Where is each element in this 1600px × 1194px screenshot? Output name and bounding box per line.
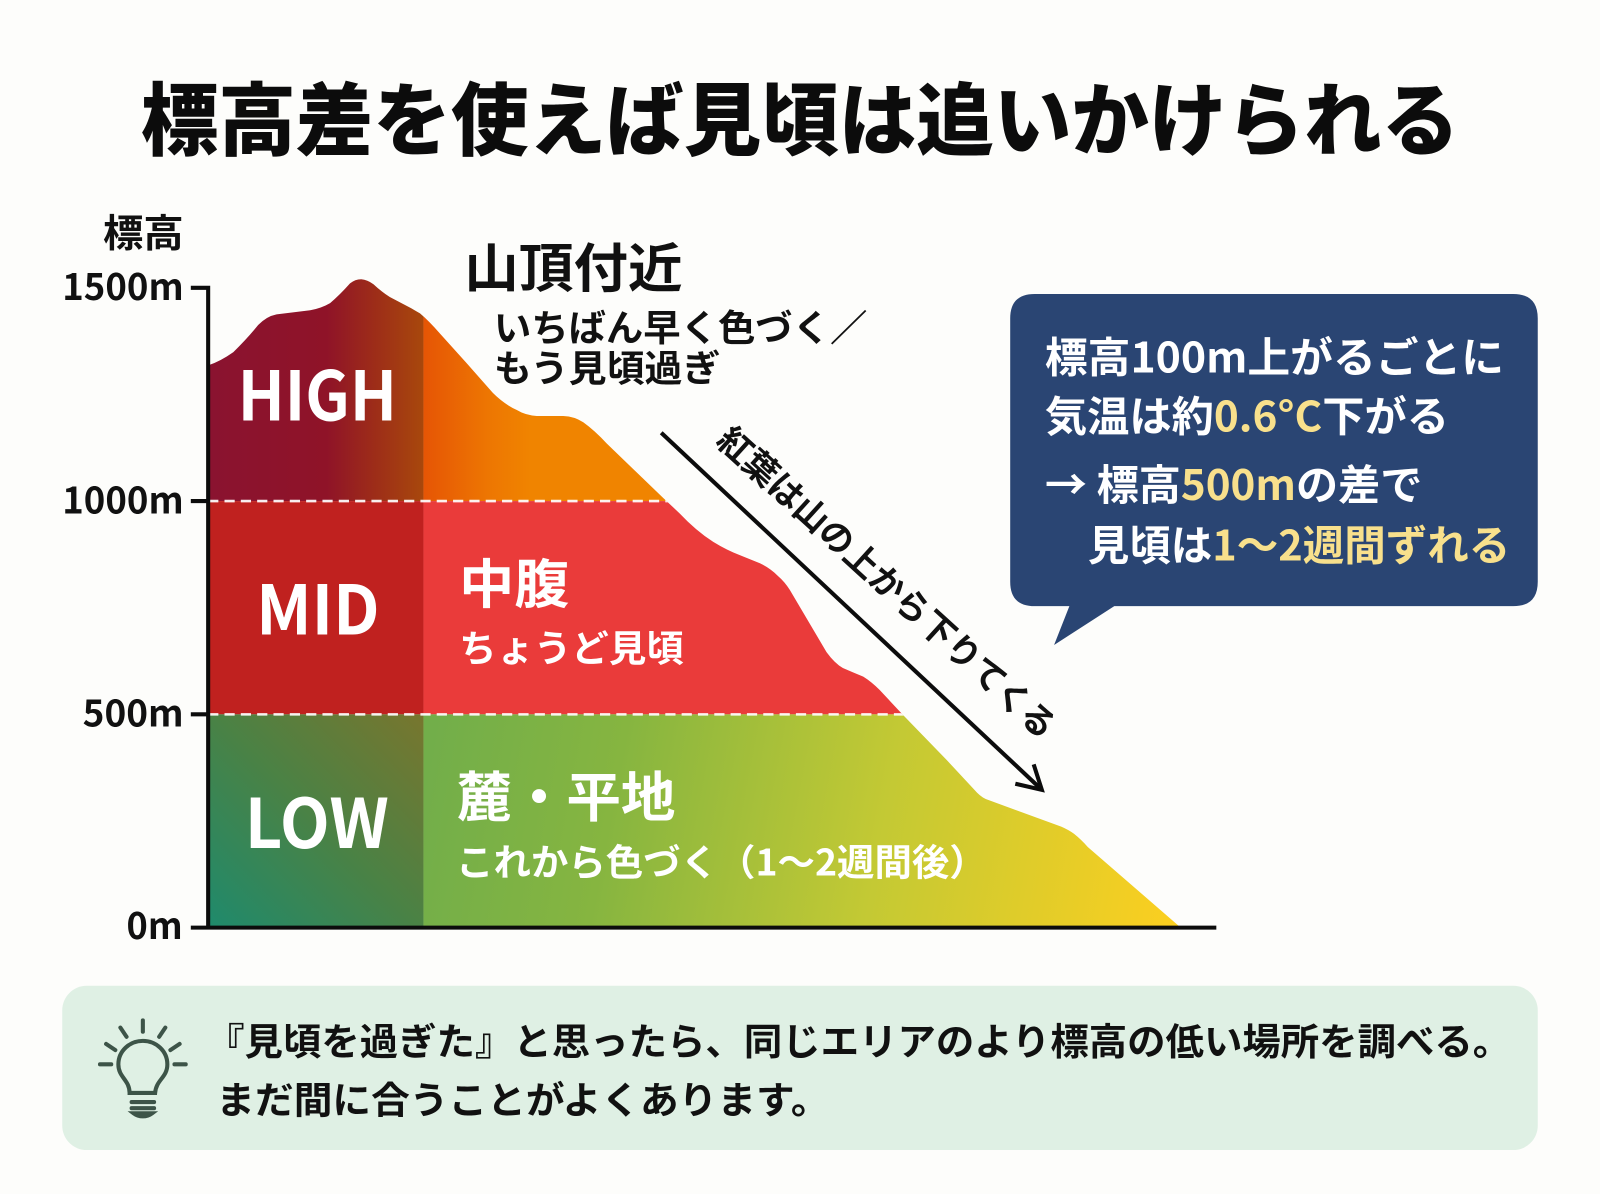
summit description: もう見頃過ぎ — [494, 339, 720, 393]
band label: LOW: LOW — [245, 769, 389, 868]
foot description: これから色づく（1〜2週間後） — [456, 833, 987, 887]
tip line 2: まだ間に合うことがよくあります。 — [216, 1069, 830, 1124]
y axis labels — [62, 257, 184, 950]
icon: light bulb — [100, 1020, 186, 1116]
summit heading: 山頂付近 — [464, 226, 683, 303]
title: 標高差を使えば見頃は追いかけられる — [141, 57, 1459, 172]
band label: MID: MID — [256, 556, 380, 655]
y axis labels: 1000m — [62, 470, 184, 524]
y axis labels: 1500m — [62, 257, 184, 311]
mountain chart — [62, 203, 1216, 950]
tip line 1: 『見頃を過ぎた』と思ったら、同じエリアのより標高の低い場所を調べる。 — [206, 1011, 1511, 1066]
y axis labels: 0m — [127, 896, 183, 950]
mid slope heading: 中腹 — [459, 542, 569, 619]
mountain bands — [208, 265, 1199, 929]
callout line 4: 見頃は1〜2週間ずれる — [1088, 512, 1510, 573]
callout bubble — [1010, 294, 1538, 645]
diagonal label: 紅葉は山の上から下りてくる — [708, 413, 1069, 748]
tip panel — [62, 986, 1538, 1150]
tip background — [62, 986, 1538, 1150]
y axis title: 標高 — [103, 203, 184, 259]
y axis labels: 500m — [83, 684, 184, 738]
callout line 3: → 標高500mの差で — [1045, 452, 1422, 513]
summit description: いちばん早く色づく／ — [494, 298, 867, 352]
callout line 2: 気温は約0.6°C下がる — [1045, 384, 1449, 445]
foot heading: 麓・平地 — [457, 753, 676, 832]
band label: HIGH: HIGH — [238, 341, 397, 440]
arrow: colours descend the mountain — [661, 433, 1042, 790]
y axis and x axis — [191, 288, 1216, 928]
callout — [1010, 294, 1538, 645]
callout line 1: 標高100m上がるごとに — [1045, 325, 1504, 386]
mid slope description: ちょうど見頃 — [459, 618, 684, 672]
summit description — [494, 298, 867, 393]
